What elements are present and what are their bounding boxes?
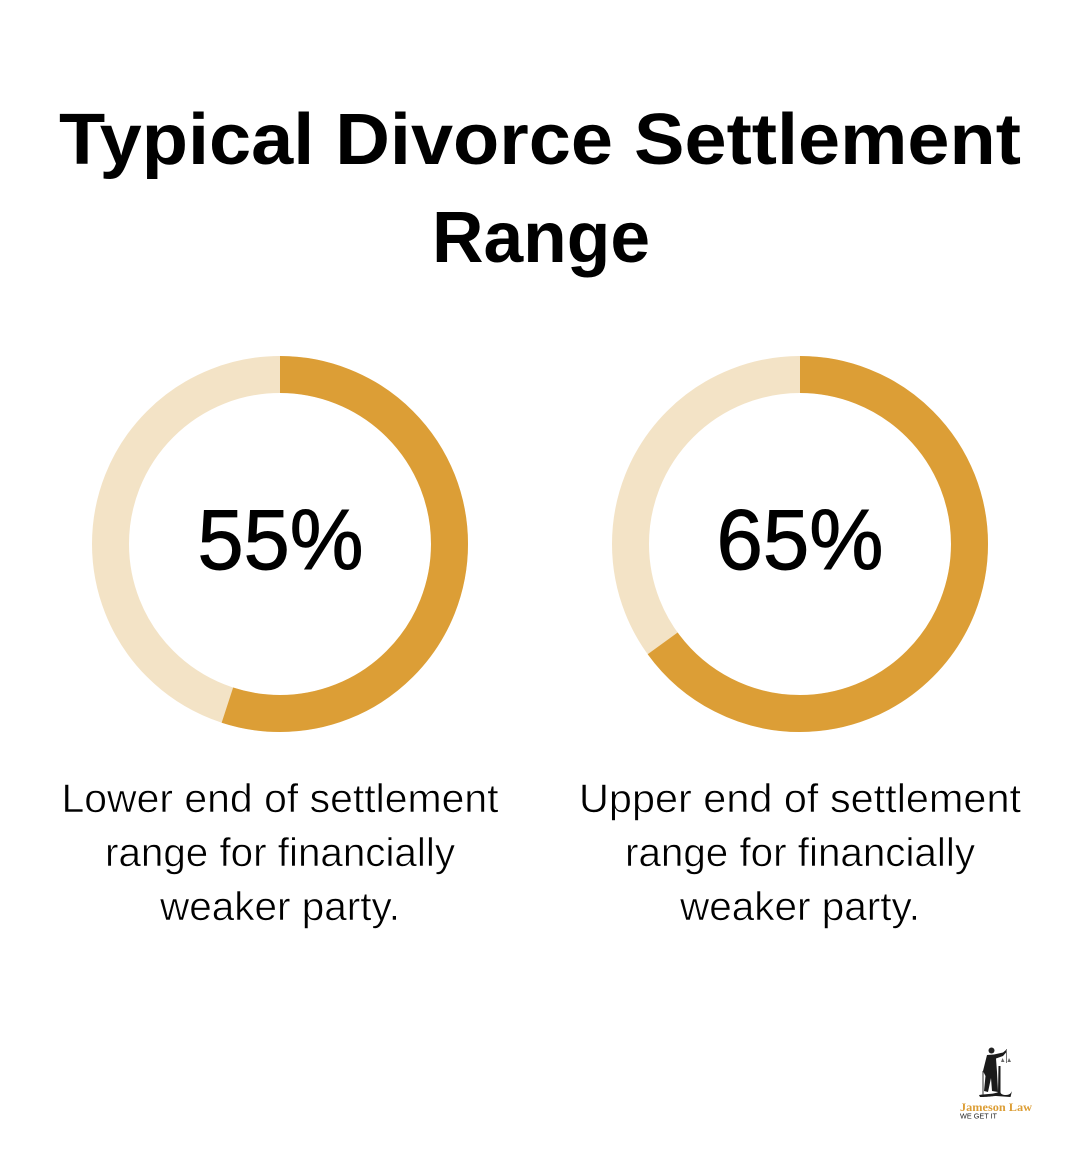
donut chart: 65% bbox=[630, 374, 970, 714]
logo tagline: WE GET IT bbox=[960, 1114, 998, 1120]
icon: lady justice with L bbox=[979, 1048, 1012, 1097]
description: lower end: range for financially bbox=[105, 831, 455, 875]
value: 55%: 55% bbox=[198, 493, 364, 588]
title: Typical Divorce Settlement bbox=[59, 99, 1021, 180]
description: upper end: weaker party. bbox=[679, 885, 920, 929]
description: lower end: weaker party. bbox=[159, 885, 400, 929]
value: 65%: 65% bbox=[716, 493, 884, 588]
description: lower end bbox=[62, 777, 499, 929]
description: upper end bbox=[579, 777, 1021, 929]
logo: Jameson Law bbox=[960, 1048, 1033, 1120]
title: Range bbox=[432, 197, 650, 278]
donut chart: 55% bbox=[110, 374, 450, 714]
description: lower end: Lower end of settlement bbox=[62, 777, 499, 821]
panel: upper end 65% bbox=[579, 374, 1021, 929]
description: upper end: range for financially bbox=[625, 831, 975, 875]
panel: lower end 55% bbox=[62, 374, 499, 929]
title bbox=[59, 99, 1021, 278]
logo name: Jameson Law bbox=[960, 1102, 1033, 1114]
description: upper end: Upper end of settlement bbox=[579, 777, 1021, 821]
